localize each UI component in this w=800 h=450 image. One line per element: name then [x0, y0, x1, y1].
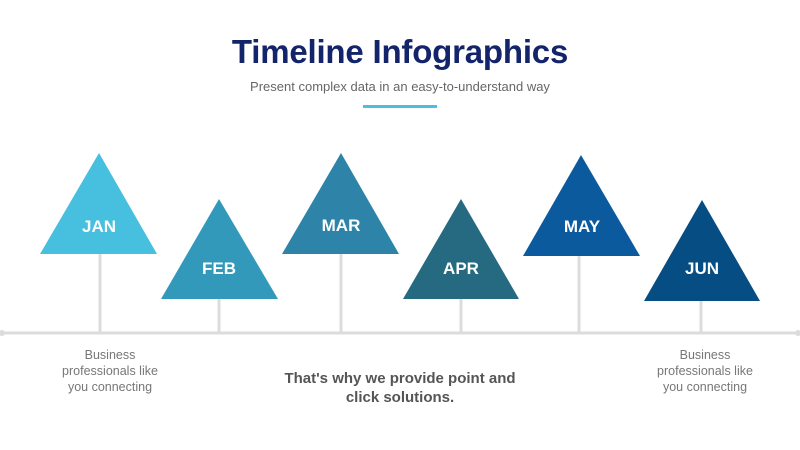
milestone: MAY: MAY	[564, 217, 601, 236]
milestone: JAN: JAN	[82, 217, 116, 236]
subtitle: Present complex data in an easy-to-understand way	[250, 79, 550, 94]
milestone: FEB	[161, 199, 278, 333]
text block: left note: Business professionals like you connecting	[62, 348, 158, 394]
milestone: JUN: JUN	[685, 259, 719, 278]
milestone: MAR	[282, 153, 399, 333]
milestone: APR	[403, 199, 519, 333]
text block: center message: That's why we provide point and click solutions.	[284, 370, 516, 406]
milestone: MAR: MAR	[322, 216, 360, 235]
title: Timeline Infographics	[232, 33, 568, 70]
milestone: JUN	[644, 200, 760, 333]
milestone: JAN	[40, 153, 157, 333]
accent underline	[363, 105, 437, 108]
milestone: MAY	[523, 155, 640, 333]
milestone: FEB: FEB	[202, 259, 236, 278]
text block: right note: Business professionals like you connecting	[657, 348, 753, 394]
milestone: APR: APR	[443, 259, 479, 278]
